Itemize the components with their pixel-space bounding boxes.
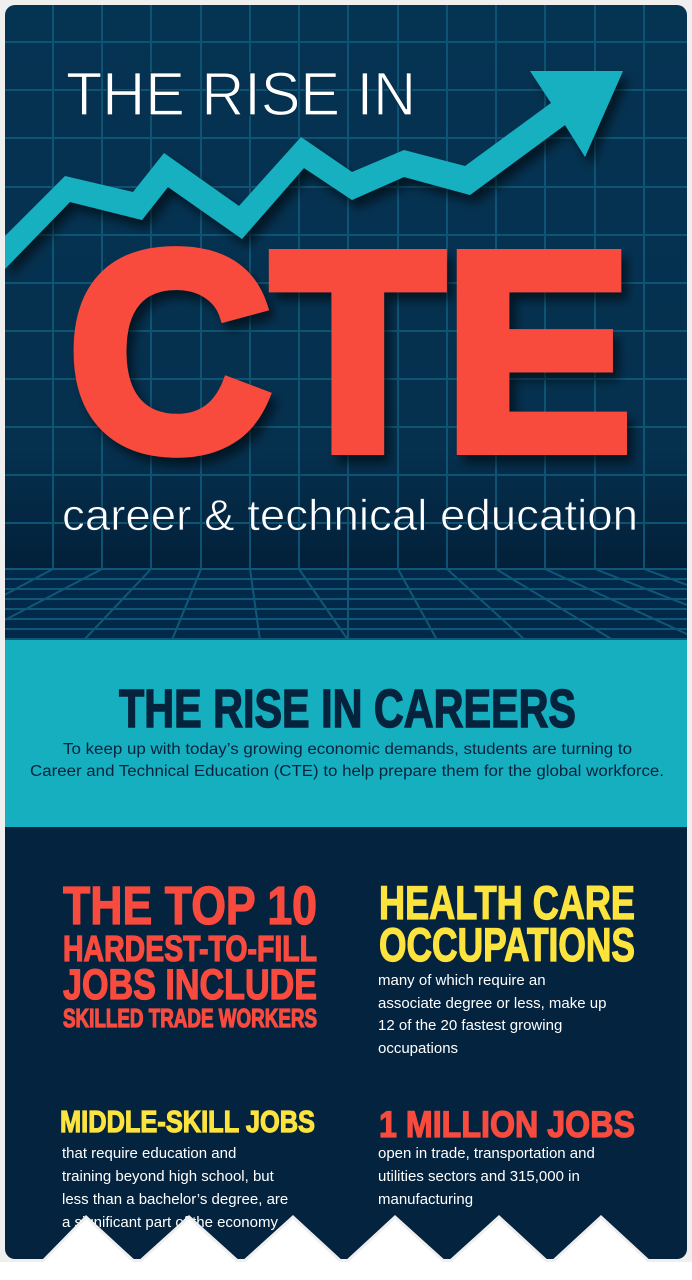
zigzag bottom edge [5, 1215, 687, 1262]
fact: 1 million jobs: manufacturing [378, 1191, 473, 1208]
fact: health care occupations: 12 of the 20 fastest growing [378, 1017, 562, 1034]
title: THE RISE IN: THE RISE IN [66, 60, 416, 128]
fact: health care occupations: many of which require an [378, 972, 546, 989]
fact: top 10 hardest-to-fill: SKILLED TRADE WORKERS [63, 1003, 317, 1033]
fact: middle-skill jobs: MIDDLE-SKILL JOBS [60, 1104, 315, 1139]
fact: 1 million jobs: utilities sectors and 315,000 in [378, 1168, 580, 1185]
text: intro: Career and Technical Education (CTE) to help prepare them for the global workforce. [30, 763, 664, 780]
fact: middle-skill jobs: training beyond high school, but [62, 1168, 275, 1185]
panel: hero header [0, 5, 692, 640]
fact: middle-skill jobs: a significant part of the economy [62, 1214, 278, 1231]
title: CTE: CTE [68, 194, 632, 509]
panel: the rise in careers [5, 640, 687, 827]
fact: top 10 hardest-to-fill [63, 876, 317, 1033]
fact: top 10 hardest-to-fill: JOBS INCLUDE [63, 961, 317, 1009]
fact: 1 million jobs [378, 1104, 635, 1208]
fact: 1 million jobs: open in trade, transportation and [378, 1145, 595, 1162]
fact: middle-skill jobs [60, 1104, 315, 1231]
panel: facts [5, 827, 687, 1259]
text: intro: To keep up with today’s growing economic demands, students are turning to [63, 741, 632, 758]
fact: 1 million jobs: 1 MILLION JOBS [379, 1104, 635, 1145]
fact: middle-skill jobs: less than a bachelor’s degree, are [62, 1191, 288, 1208]
subtitle: career & technical education: career & technical education [62, 491, 638, 540]
fact: health care occupations [378, 876, 635, 1057]
icon: rising trend arrow [4, 71, 623, 270]
fact: top 10 hardest-to-fill: THE TOP 10 [63, 876, 317, 936]
fact: top 10 hardest-to-fill: HARDEST-TO-FILL [63, 928, 317, 969]
text: intro [30, 741, 664, 780]
fact: health care occupations: associate degree or less, make up [378, 995, 606, 1012]
floor grid [0, 569, 692, 640]
fact: health care occupations: occupations [378, 1040, 458, 1057]
fact: middle-skill jobs: that require education and [62, 1145, 236, 1162]
